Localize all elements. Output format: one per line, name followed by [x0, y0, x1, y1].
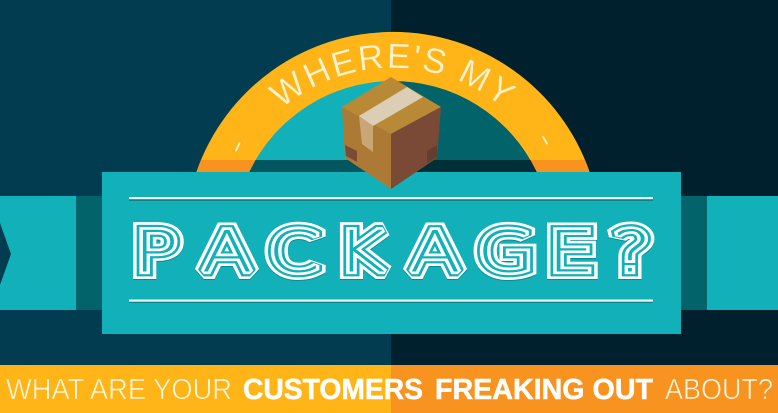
- striped heading: PACKAGE?: PACKAGE?: [134, 219, 652, 285]
- arch tick: left: [236, 143, 240, 150]
- arch: [196, 32, 590, 172]
- banner rule: bottom: [129, 300, 653, 303]
- ribbon: left tail: [0, 196, 102, 310]
- bottom band: [0, 365, 778, 413]
- striped heading: PACKAGE?: PACKAGE?: [134, 219, 652, 285]
- arch tick: right: [543, 137, 547, 144]
- tagline: FREAKING OUT: [435, 374, 653, 406]
- tagline: WHAT ARE YOUR: [6, 374, 232, 406]
- ribbon: right tail: [681, 196, 778, 310]
- banner rule: top: [129, 197, 653, 201]
- striped heading: PACKAGE?: PACKAGE?: [134, 219, 652, 285]
- striped heading: PACKAGE?: PACKAGE?: [134, 219, 652, 285]
- icon: cardboard box: [342, 77, 441, 189]
- main teal banner: [102, 172, 681, 334]
- arched heading: WHERE'S MY: WHERE'S MY: [268, 44, 517, 104]
- tagline: [6, 374, 773, 406]
- tagline: ABOUT?: [665, 374, 773, 406]
- tagline: CUSTOMERS: [243, 374, 423, 406]
